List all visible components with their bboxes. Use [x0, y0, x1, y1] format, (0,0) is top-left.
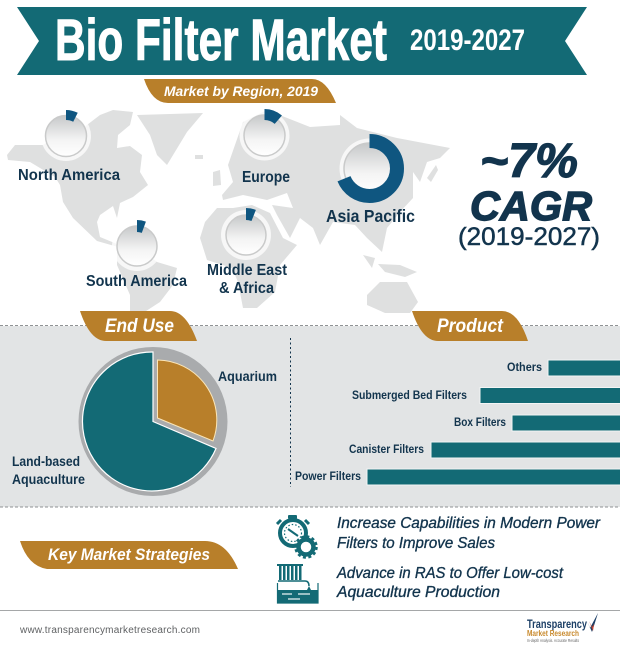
tab: key market strategies: Key Market Strategies — [48, 545, 210, 564]
bar chart: product — [295, 360, 620, 485]
label: middle east and africa: Middle East — [207, 262, 287, 279]
logo: transparency market research — [527, 613, 598, 643]
title banner — [17, 7, 587, 75]
tab: product: Product — [437, 316, 504, 337]
label: south america: South America — [86, 273, 187, 290]
strategy text 1 — [337, 515, 601, 552]
footer url: www.transparencymarketresearch.com — [19, 625, 200, 636]
tab: key market strategies — [20, 541, 238, 569]
tab: end use — [80, 311, 197, 341]
bar chart: product: Canister Filters — [349, 442, 424, 456]
bar chart: product: Box Filters — [454, 415, 506, 429]
donut: asia pacific — [340, 138, 400, 198]
label: land-based aquaculture: Aquaculture — [12, 472, 85, 487]
label: middle east and africa — [207, 262, 287, 297]
donut: north america — [41, 111, 91, 161]
world map — [7, 110, 450, 313]
strategy text 2: Advance in RAS to Offer Low-cost — [336, 565, 564, 582]
icon: recirculating aquaculture system — [277, 564, 318, 603]
label: asia pacific: Asia Pacific — [326, 206, 415, 226]
label: middle east and africa: & Africa — [219, 280, 274, 297]
pie chart: end use — [78, 347, 228, 496]
years subtitle: 2019-2027 — [410, 24, 525, 57]
tab: end use: End Use — [105, 316, 174, 337]
cagr callout: ~7% — [480, 135, 578, 188]
donut: south america — [112, 221, 162, 271]
label: land-based aquaculture: Land-based — [12, 454, 80, 469]
strategy text 2 — [336, 565, 564, 601]
strategy text 1: Increase Capabilities in Modern Power — [337, 515, 601, 532]
logo: transparency market research: Market Research — [527, 629, 579, 638]
bar chart: product: Submerged Bed Filters — [352, 388, 467, 402]
bar chart: product: Power Filters — [295, 469, 361, 483]
strategy text 2: Aquaculture Production — [336, 584, 500, 601]
tab: product — [412, 311, 528, 341]
donut: middle east and africa — [221, 210, 271, 260]
tab: market by region — [144, 79, 336, 103]
panel: end use and product — [0, 326, 620, 507]
donut: europe — [240, 110, 290, 160]
label: europe: Europe — [242, 169, 290, 186]
cagr callout: CAGR — [470, 183, 592, 229]
cagr callout: (2019-2027) — [458, 223, 600, 251]
tab: market by region: Market by Region, 2019 — [164, 83, 318, 99]
icon: stopwatch and gear — [277, 515, 316, 558]
title text: Bio Filter Market — [55, 8, 387, 73]
label: land-based aquaculture — [12, 454, 85, 487]
label: aquarium: Aquarium — [218, 369, 277, 384]
logo: transparency market research: Transparency — [527, 619, 587, 631]
label: north america: North America — [18, 167, 120, 184]
strategy text 1: Filters to Improve Sales — [337, 535, 495, 552]
bar chart: product: Others — [507, 360, 542, 374]
logo: transparency market research: In-depth Analysis. Accurate Results — [527, 638, 580, 643]
cagr callout — [458, 135, 600, 251]
